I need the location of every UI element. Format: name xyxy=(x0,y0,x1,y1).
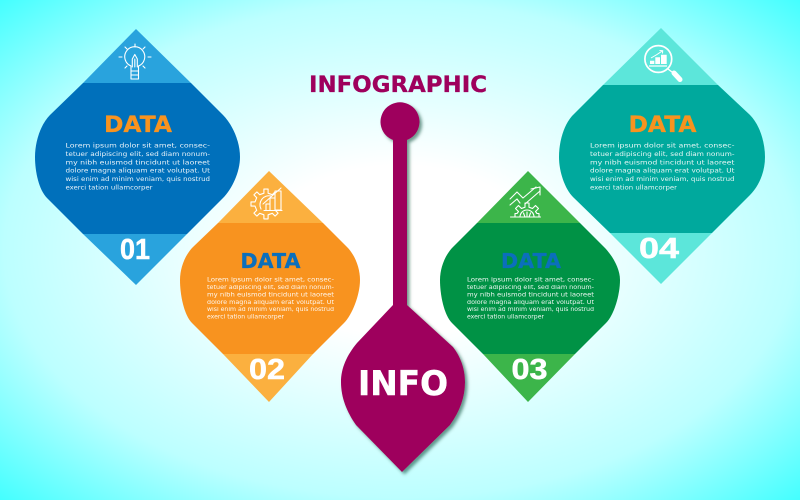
number: 02 xyxy=(249,354,285,386)
body text: wisi enim ad minim veniam, quis nostrud xyxy=(590,175,734,183)
body text: dolore magna aliquam erat volutpat. Ut xyxy=(590,166,735,174)
diamond bottom tip xyxy=(483,354,575,402)
body text xyxy=(207,278,335,320)
body text: exerci tation ullamcorper xyxy=(590,184,677,192)
body text: Lorem ipsum dolor sit amet, consec- xyxy=(467,278,594,284)
diamond bottom tip xyxy=(223,354,313,402)
diamond bottom tip xyxy=(610,233,712,284)
panel body xyxy=(440,223,620,354)
number: 04 xyxy=(639,233,679,265)
body text: tetuer adipiscing elit, sed diam nonum- xyxy=(66,150,211,158)
panel body xyxy=(559,85,765,233)
body text xyxy=(467,278,595,320)
body text xyxy=(66,142,211,192)
icon: magnifier with chart xyxy=(645,46,680,80)
diamond top tip xyxy=(83,29,191,83)
panel 01 xyxy=(35,29,240,285)
diamond bottom tip xyxy=(83,234,187,285)
body text: Lorem ipsum dolor sit amet, consec- xyxy=(66,142,211,150)
number: 01 xyxy=(120,234,150,266)
body text: Lorem ipsum dolor sit amet, consec- xyxy=(590,142,735,150)
heading: DATA xyxy=(240,249,301,273)
diamond top tip xyxy=(477,171,580,223)
pin shape xyxy=(341,102,465,472)
body text: dolore magna aliquam erat volutpat. Ut xyxy=(66,166,210,174)
body text: wisi enim ad minim veniam, quis nostrud xyxy=(66,175,210,183)
INFO label: INFO xyxy=(358,364,448,404)
diamond top tip xyxy=(218,171,323,223)
heading: DATA xyxy=(501,249,562,273)
body text: wisi enim ad minim veniam, quis nostrud xyxy=(207,307,334,313)
diamond top tip xyxy=(603,28,718,85)
body text: my nibh euismod tincidunt ut laoreet xyxy=(207,292,335,298)
icon: gear with bar chart xyxy=(251,188,282,219)
body text: exerci tation ullamcorper xyxy=(467,314,545,320)
body text: exerci tation ullamcorper xyxy=(207,314,285,320)
panel 03 xyxy=(440,171,620,402)
body text xyxy=(590,142,735,192)
body text: wisi enim ad minim veniam, quis nostrud xyxy=(467,307,594,313)
central pin with INFO xyxy=(341,102,465,472)
body text: exerci tation ullamcorper xyxy=(66,184,153,192)
body text: tetuer adipiscing elit, sed diam nonum- xyxy=(467,285,594,291)
heading: DATA xyxy=(628,113,696,138)
body text: Lorem ipsum dolor sit amet, consec- xyxy=(207,278,334,284)
body text: tetuer adipiscing elit, sed diam nonum- xyxy=(207,285,334,291)
body text: tetuer adipiscing elit, sed diam nonum- xyxy=(590,150,735,158)
body text: dolore magna aliquam erat volutpat. Ut xyxy=(207,300,335,306)
body text: dolore magna aliquam erat volutpat. Ut xyxy=(467,300,595,306)
panel 04 xyxy=(559,28,765,284)
number: 03 xyxy=(512,354,548,386)
panel body xyxy=(180,223,360,354)
panel body xyxy=(35,83,240,234)
heading: DATA xyxy=(104,113,172,138)
body text: my nibh euismod tincidunt ut laoreet xyxy=(66,158,211,166)
panel 02 xyxy=(180,171,360,402)
icon: gear with rising arrow xyxy=(510,187,540,217)
body text: my nibh euismod tincidunt ut laoreet xyxy=(467,292,595,298)
icon: light bulb with pencil xyxy=(119,44,151,79)
title: INFOGRAPHIC xyxy=(309,73,487,98)
body text: my nibh euismod tincidunt ut laoreet xyxy=(590,158,735,166)
